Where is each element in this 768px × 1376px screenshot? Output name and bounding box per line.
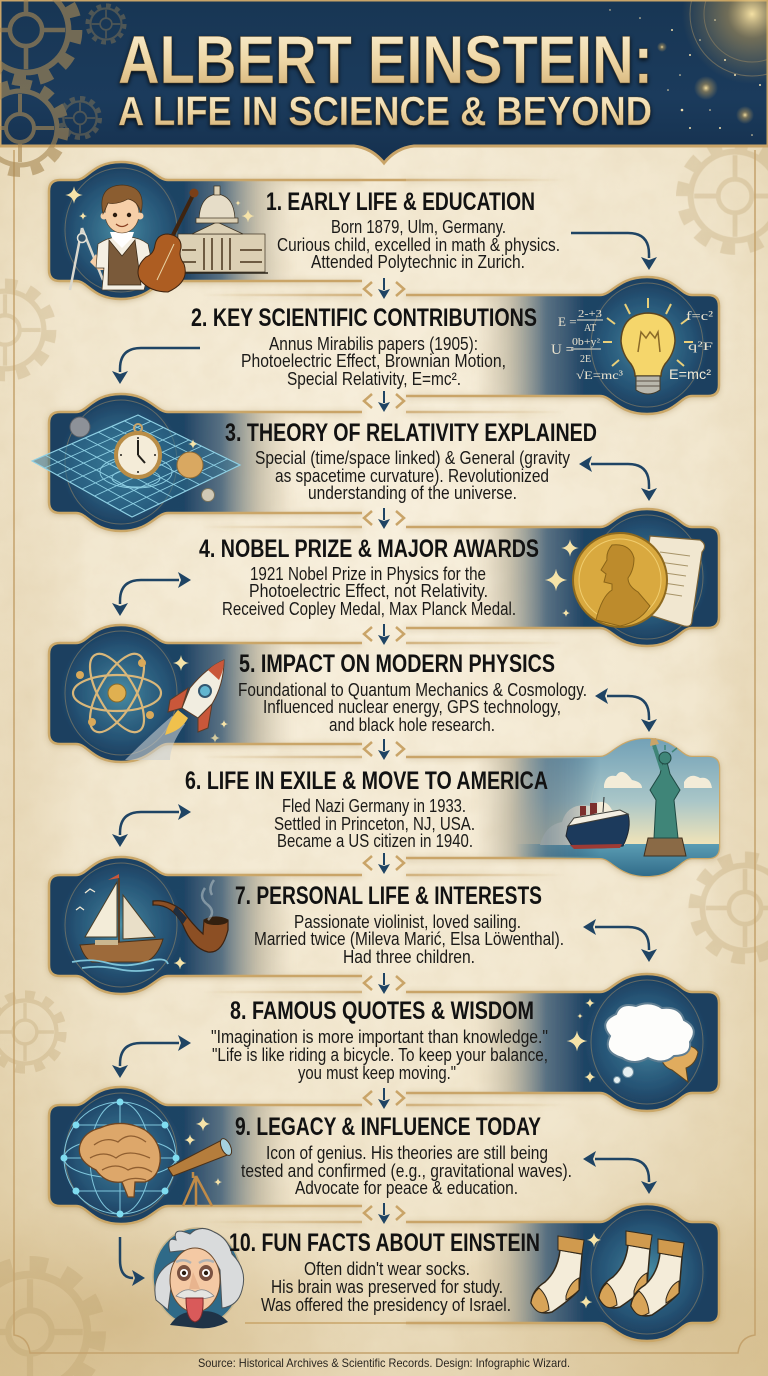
text 3: understanding of the universe. — [308, 483, 517, 503]
connector 2 — [364, 391, 404, 408]
icon: medal and scroll — [545, 533, 705, 627]
panel 5: modern physics — [49, 625, 587, 762]
arrow 6 to 7 — [120, 812, 179, 835]
arrow 8 to 9 — [120, 1043, 179, 1066]
arrow 5 to 6 — [607, 696, 649, 720]
arrow 7 to 8 — [595, 927, 649, 950]
text 6: Settled in Princeton, NJ, USA. — [274, 814, 475, 834]
text 8 — [211, 1027, 548, 1083]
text 5: Influenced nuclear energy, GPS technology, — [263, 697, 561, 717]
icon: light bulb and formulas: E = — [558, 314, 577, 329]
title — [118, 22, 653, 134]
icon: brain, network globe and telescope — [60, 1098, 234, 1218]
connector 6 — [364, 853, 404, 870]
heading 3: 3. THEORY OF RELATIVITY EXPLAINED — [225, 419, 597, 447]
heading 7: 7. PERSONAL LIFE & INTERESTS — [235, 882, 542, 910]
icon: light bulb and formulas — [551, 298, 713, 394]
arrow 4 to 5 — [120, 580, 179, 604]
band 3 — [49, 394, 565, 531]
text 1: Curious child, excelled in math & physics. — [277, 235, 560, 255]
connector 4 — [364, 624, 404, 641]
text 2 — [241, 334, 506, 389]
icon: light bulb and formulas: AT — [584, 323, 596, 334]
source line: Source: Historical Archives & Scientific Records. Design: Infographic Wizard. — [198, 1356, 570, 1370]
band 4 — [203, 509, 719, 646]
panel 2: contributions — [191, 277, 719, 414]
text 7: Married twice (Mileva Marić, Elsa Löwenthal). — [254, 929, 564, 949]
text 2: Photoelectric Effect, Brownian Motion, — [241, 351, 506, 371]
title: ALBERT EINSTEIN: — [118, 22, 653, 98]
panel 7: personal life — [49, 857, 565, 994]
band 8 — [203, 974, 719, 1111]
heading 9: 9. LEGACY & INFLUENCE TODAY — [235, 1113, 541, 1141]
top rule gap filler — [362, 179, 406, 181]
icon: socks — [531, 1231, 684, 1316]
text 4 — [222, 564, 516, 619]
text 3 — [255, 448, 570, 503]
text 5 — [238, 680, 587, 735]
icon: light bulb and formulas: 2E — [580, 354, 591, 365]
band 2 — [203, 277, 719, 414]
text 10: His brain was preserved for study. — [271, 1277, 503, 1297]
icon: sailboat and pipe — [72, 874, 228, 971]
title: A LIFE IN SCIENCE & BEYOND — [118, 88, 652, 134]
panel 9: legacy — [49, 1087, 572, 1224]
arrow 9 to 10 — [595, 1159, 649, 1182]
header starfield — [609, 0, 768, 136]
panel 6: exile — [185, 735, 725, 884]
text 8: you must keep moving." — [298, 1063, 456, 1083]
heading 2: 2. KEY SCIENTIFIC CONTRIBUTIONS — [191, 304, 537, 332]
text 6 — [274, 796, 475, 851]
arrow 2 to 3 — [120, 348, 200, 372]
arrow 1 to 2 — [571, 233, 649, 258]
header gears — [0, 0, 124, 172]
connector 7 — [364, 973, 404, 990]
text 10: Was offered the presidency of Israel. — [261, 1295, 511, 1315]
text 9: tested and confirmed (e.g., gravitational waves). — [241, 1161, 572, 1181]
text 1 — [277, 217, 560, 272]
band 6 — [203, 739, 719, 876]
band 7 — [49, 857, 565, 994]
heading 6: 6. LIFE IN EXILE & MOVE TO AMERICA — [185, 767, 548, 795]
heading 10: 10. FUN FACTS ABOUT EINSTEIN — [229, 1229, 540, 1257]
icon: spacetime grid with clock and planets — [32, 415, 240, 517]
text 7 — [254, 912, 564, 967]
connector 1 — [364, 278, 404, 296]
panel 4: nobel — [199, 509, 719, 646]
panel 3: relativity — [32, 394, 597, 531]
text 4: Received Copley Medal, Max Planck Medal. — [222, 599, 516, 619]
icon: thought cloud and speech bubble — [567, 998, 698, 1084]
icon: light bulb and formulas: q²F — [688, 339, 713, 353]
panel 8: quotes — [203, 974, 719, 1111]
text 3: Special (time/space linked) & General (gravity — [255, 448, 570, 468]
icon: light bulb and formulas: 2-+3 — [578, 309, 602, 320]
text 6: Fled Nazi Germany in 1933. — [282, 796, 466, 816]
header banner — [0, 0, 768, 172]
connector 5 — [364, 739, 404, 756]
text 7: Had three children. — [343, 947, 475, 967]
panel 1: early life — [49, 162, 565, 299]
icon: light bulb and formulas: √E=mc³ — [576, 368, 623, 382]
panel 10: fun facts — [153, 1204, 719, 1341]
icon: light bulb and formulas: 0b+y² — [572, 337, 600, 348]
text 7: Passionate violinist, loved sailing. — [294, 912, 521, 932]
text 6: Became a US citizen in 1940. — [277, 831, 473, 851]
text 2: Special Relativity, E=mc². — [287, 369, 461, 389]
icon: atom and rocket — [73, 646, 228, 760]
connector 3 — [364, 508, 404, 525]
bottom gold rule — [245, 1322, 406, 1324]
arrow 3 to 4 — [591, 464, 649, 489]
icon: light bulb and formulas: U = — [551, 342, 574, 358]
text 5: and black hole research. — [329, 715, 495, 735]
text 10: Often didn't wear socks. — [304, 1259, 470, 1279]
text 3: as spacetime curvature). Revolutionized — [275, 466, 549, 486]
heading 1: 1. EARLY LIFE & EDUCATION — [266, 188, 535, 216]
band 5 — [49, 625, 565, 762]
text 8: "Life is like riding a bicycle. To keep your balance, — [212, 1045, 548, 1065]
text 9: Icon of genius. His theories are still being — [266, 1143, 548, 1163]
text 8: "Imagination is more important than knowledge." — [211, 1027, 548, 1047]
icon: light bulb and formulas: E=mc² — [669, 366, 711, 382]
text 9 — [241, 1143, 572, 1198]
text 4: Photoelectric Effect, not Relativity. — [249, 581, 488, 601]
text 10 — [261, 1259, 511, 1315]
text 9: Advocate for peace & education. — [295, 1178, 518, 1198]
band 1 — [49, 162, 565, 299]
text 2: Annus Mirabilis papers (1905): — [269, 334, 478, 354]
text 4: 1921 Nobel Prize in Physics for the — [250, 564, 486, 584]
icon: Einstein portrait — [153, 1228, 244, 1328]
heading 4: 4. NOBEL PRIZE & MAJOR AWARDS — [199, 535, 539, 563]
band 10 — [203, 1204, 719, 1341]
text 1: Attended Polytechnic in Zurich. — [311, 252, 525, 272]
heading 8: 8. FAMOUS QUOTES & WISDOM — [230, 997, 534, 1025]
connector 9 — [364, 1203, 404, 1220]
icon: light bulb and formulas: f=c² — [686, 308, 713, 323]
arrow into panel 10 — [120, 1237, 133, 1278]
heading 5: 5. IMPACT ON MODERN PHYSICS — [239, 650, 555, 678]
icon: boy, compass, violin, polytechnic — [65, 185, 268, 292]
icon: ocean liner and statue of liberty — [520, 738, 719, 876]
connector 8 — [364, 1088, 404, 1105]
band 9 — [49, 1087, 565, 1224]
text 5: Foundational to Quantum Mechanics & Cosmology. — [238, 680, 587, 700]
text 1: Born 1879, Ulm, Germany. — [331, 217, 506, 237]
